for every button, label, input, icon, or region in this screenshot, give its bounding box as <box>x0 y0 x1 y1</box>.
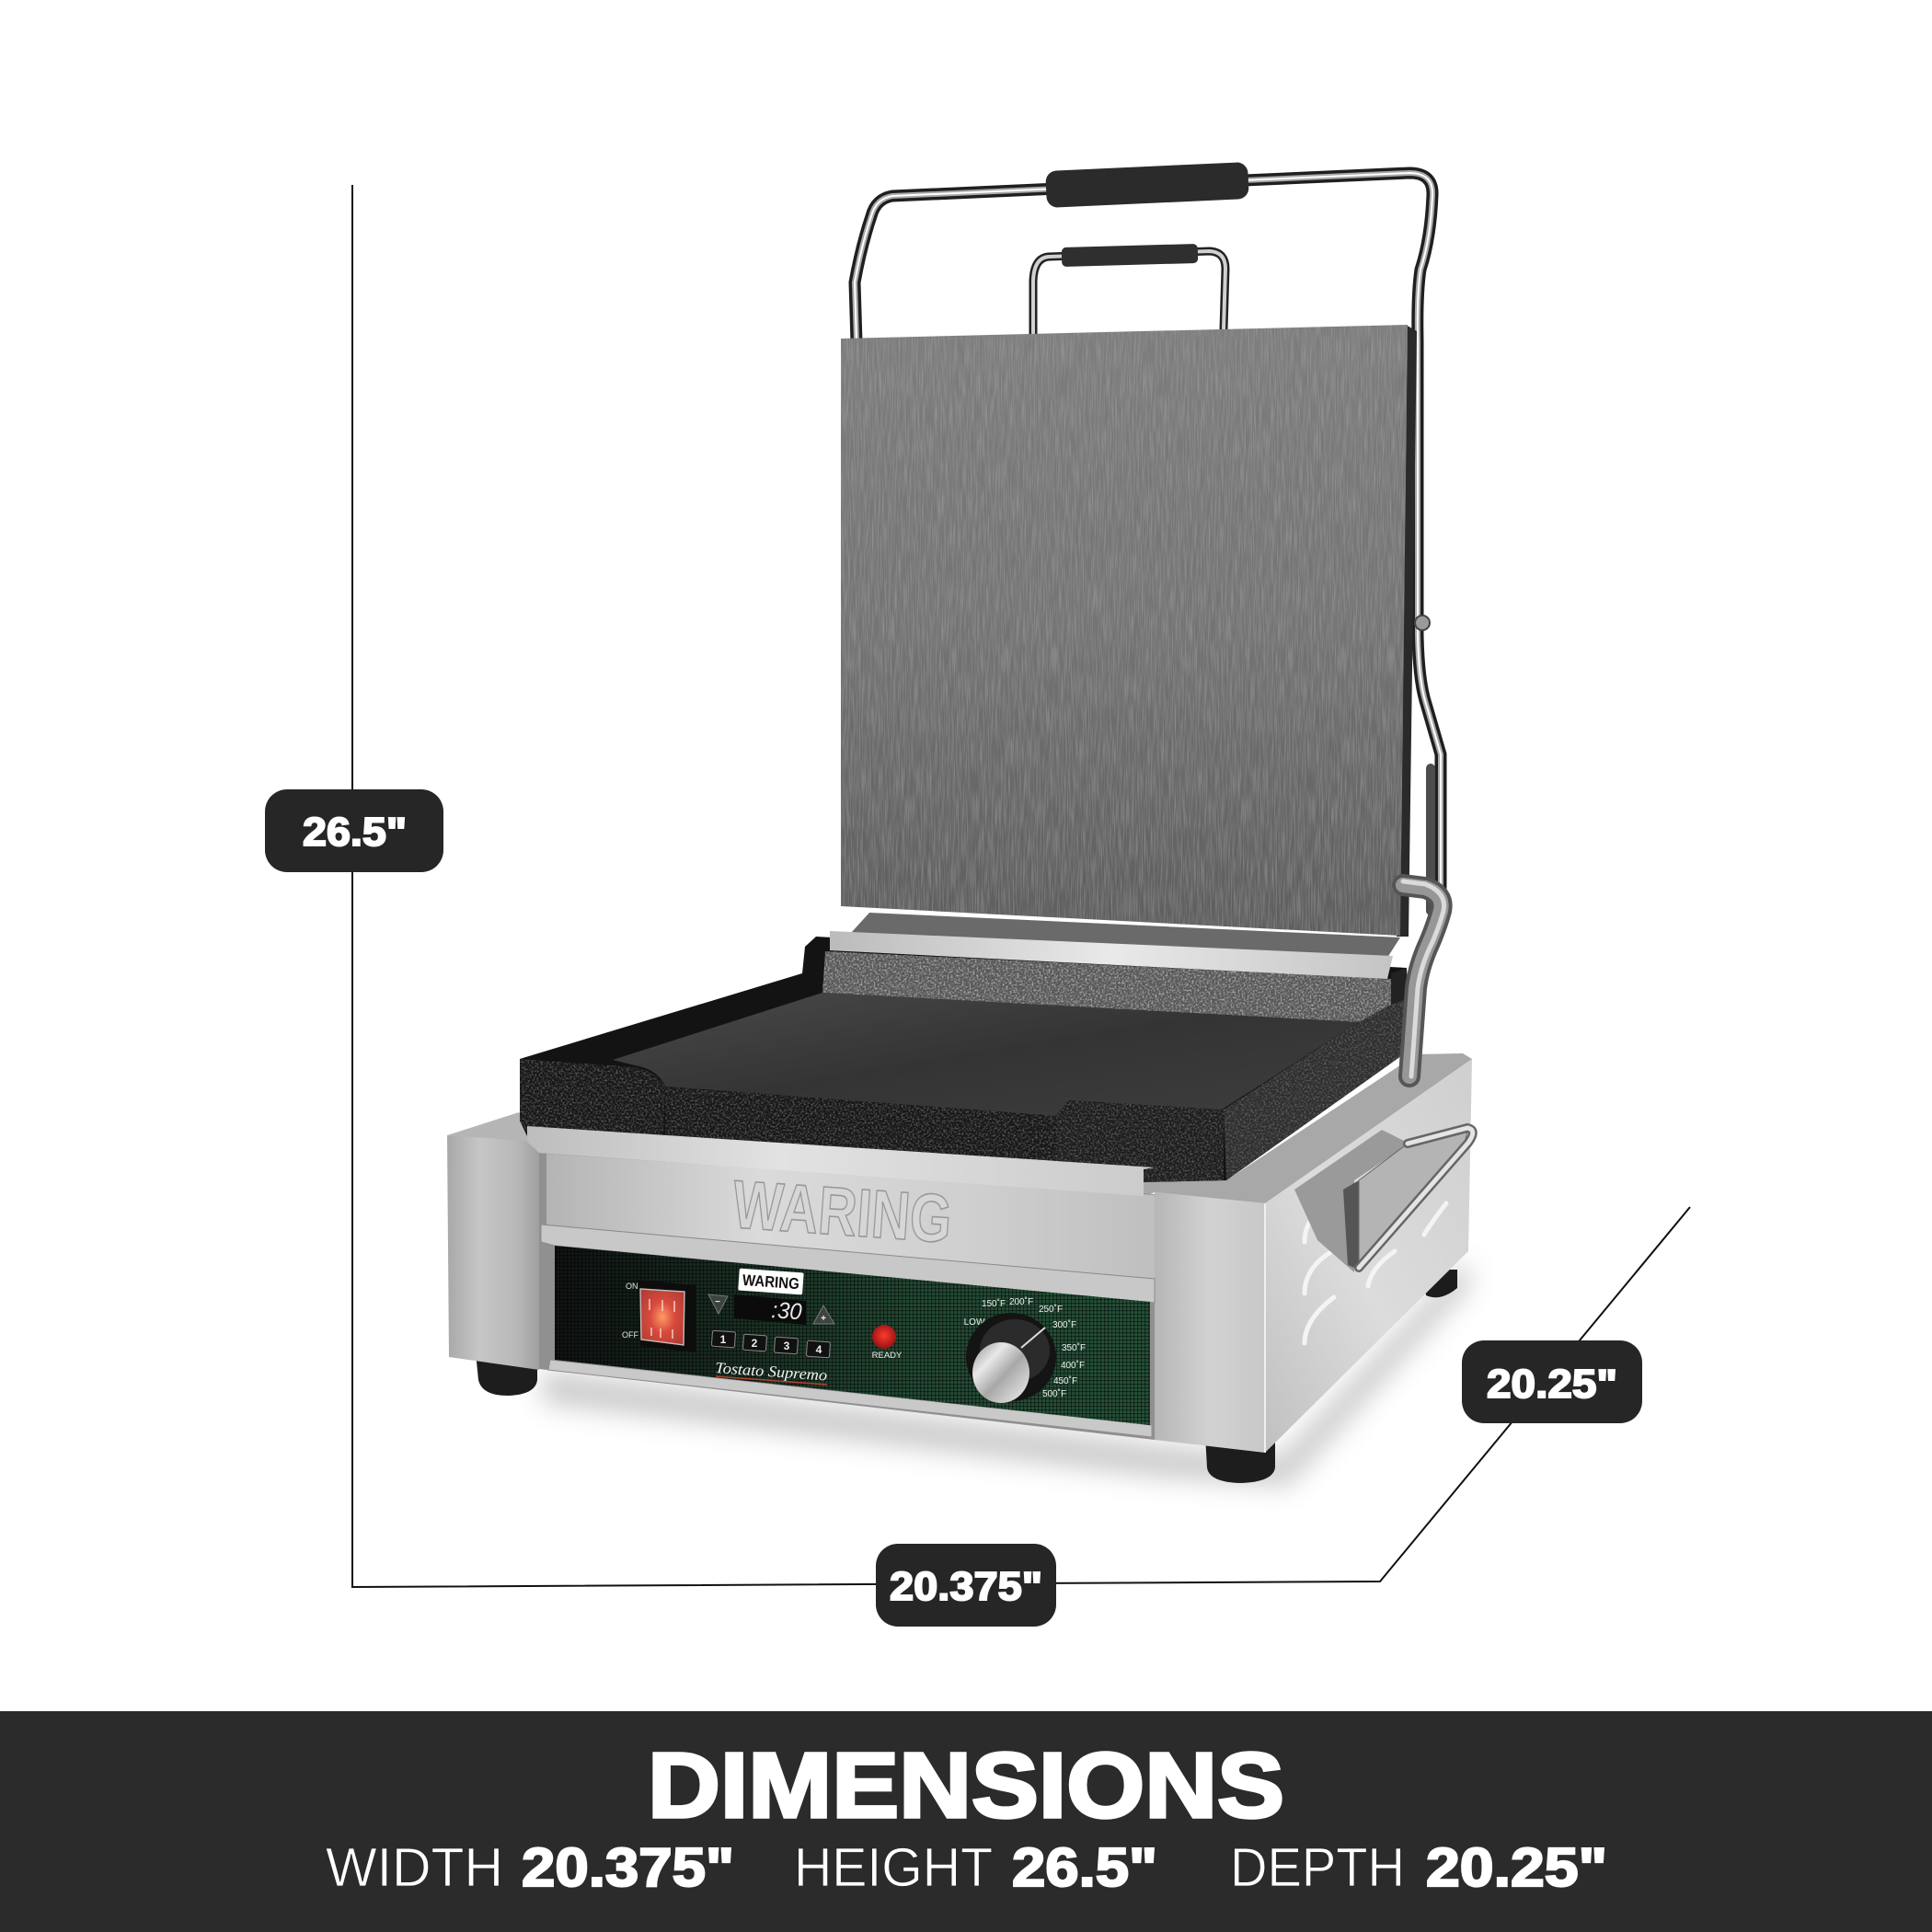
height value: 26.5" <box>303 810 407 855</box>
griddle cooking surface <box>613 993 1359 1116</box>
switch lens <box>640 1289 684 1345</box>
plus triangle <box>813 1305 834 1324</box>
switch housing <box>638 1280 696 1352</box>
steel scraper bar <box>830 931 1393 979</box>
small handle frame <box>1033 251 1225 339</box>
griddle front strip <box>665 1087 1056 1196</box>
knob body <box>966 1313 1056 1401</box>
depth number: 20.25" <box>1426 1837 1607 1898</box>
hinge shelf <box>851 913 1400 960</box>
right foot <box>1205 1435 1275 1483</box>
green mesh panel <box>555 1246 1150 1425</box>
250 label: 250˚F <box>1039 1304 1063 1315</box>
button 1 box <box>711 1330 736 1348</box>
griddle silhouette <box>520 937 1407 1182</box>
waring badge <box>738 1269 804 1294</box>
control panel <box>555 1246 1150 1425</box>
side corner line <box>1264 1203 1266 1453</box>
plus button <box>813 1305 834 1324</box>
left pillar <box>447 1135 539 1370</box>
knob pointer <box>1021 1328 1045 1348</box>
button 2 label: 2 <box>752 1337 758 1350</box>
product: panini grill <box>447 162 1473 1486</box>
floor shadow <box>543 1260 1472 1486</box>
on label: ON <box>626 1282 638 1291</box>
height number: 26.5" <box>1012 1837 1157 1898</box>
footer background <box>0 1711 1932 1932</box>
footer band <box>0 1711 1932 1932</box>
hinge bolt <box>1415 615 1430 630</box>
display background <box>734 1294 806 1325</box>
width label <box>876 1544 1056 1627</box>
off label: OFF <box>622 1330 638 1340</box>
450 label: 450˚F <box>1053 1375 1077 1386</box>
latch bar <box>1359 1128 1473 1268</box>
left foot <box>476 1352 537 1396</box>
height pill <box>265 789 443 872</box>
front panel frame <box>539 1153 1155 1440</box>
divider strip <box>541 1225 1155 1303</box>
title: DIMENSIONS <box>648 1734 1284 1837</box>
button 4 box <box>806 1340 831 1358</box>
model name: Tostato Supremo <box>715 1359 828 1385</box>
height caption: HEIGHT <box>794 1837 993 1898</box>
height label <box>265 789 443 872</box>
body top surface <box>1141 1053 1472 1203</box>
switch marks <box>650 1299 674 1339</box>
200 label: 200˚F <box>1009 1296 1033 1307</box>
preset button 4 <box>806 1340 831 1358</box>
griddle side <box>1224 998 1408 1180</box>
latch rear plate <box>1294 1130 1409 1272</box>
left top surface <box>447 1112 552 1145</box>
latch dark fold <box>1343 1180 1359 1270</box>
griddle back right corner <box>1380 968 1409 1023</box>
lower trim <box>548 1360 1152 1437</box>
knob cap <box>972 1342 1029 1403</box>
knob ridges <box>980 1319 1050 1382</box>
rocker switch <box>638 1280 696 1352</box>
latch bracket <box>1294 1128 1473 1272</box>
timer display <box>734 1294 806 1325</box>
low label: LOW <box>964 1317 985 1328</box>
ready label: READY <box>872 1351 903 1361</box>
right pillar <box>1155 1192 1265 1453</box>
minus sign: − <box>715 1297 720 1307</box>
depth value: 20.25" <box>1487 1362 1617 1407</box>
small handle grip <box>1062 244 1198 267</box>
500 label: 500˚F <box>1042 1388 1066 1399</box>
large handle grip <box>1045 162 1249 208</box>
minus triangle <box>708 1294 728 1314</box>
dimension guide lines <box>352 185 1690 1587</box>
badge text: WARING <box>742 1271 799 1293</box>
front lip <box>527 1126 1155 1196</box>
button 3 label: 3 <box>784 1340 790 1352</box>
griddle left block <box>520 1059 665 1141</box>
width caption: WIDTH <box>326 1837 503 1898</box>
temperature knob <box>966 1313 1056 1403</box>
badge background <box>738 1269 804 1294</box>
display digits: :30 <box>771 1297 803 1325</box>
button 3 box <box>774 1337 799 1354</box>
embossed logo: WARING <box>730 1166 954 1258</box>
large handle frame <box>855 173 1441 911</box>
ready light <box>872 1325 896 1349</box>
depth caption: DEPTH <box>1230 1837 1405 1898</box>
upper plate edge <box>1397 325 1417 937</box>
plus sign: + <box>821 1314 826 1324</box>
preset button 3 <box>774 1337 799 1354</box>
400 label: 400˚F <box>1061 1360 1085 1371</box>
model underline <box>716 1376 827 1385</box>
button 4 label: 4 <box>816 1343 822 1356</box>
lower arm <box>1403 881 1444 1076</box>
button 1 label: 1 <box>720 1333 727 1346</box>
width pill <box>876 1544 1056 1627</box>
300 label: 300˚F <box>1052 1319 1076 1330</box>
mesh texture <box>555 1246 1150 1425</box>
side vents <box>1305 1198 1446 1343</box>
350 label: 350˚F <box>1062 1342 1086 1353</box>
width value: 20.375" <box>890 1564 1042 1609</box>
minus button <box>708 1294 728 1314</box>
back right foot <box>1423 1270 1457 1297</box>
width number: 20.375" <box>522 1837 734 1898</box>
griddle back wall <box>822 951 1393 1022</box>
griddle right block <box>1056 1100 1224 1182</box>
latch front plate <box>1359 1128 1468 1270</box>
depth pill <box>1462 1340 1642 1423</box>
150 label: 150˚F <box>982 1298 1006 1309</box>
upper cooking plate <box>841 325 1408 936</box>
button 2 box <box>742 1334 767 1351</box>
temperature labels <box>964 1296 1086 1399</box>
preset button 1 <box>711 1330 736 1348</box>
body side panel <box>1265 1059 1472 1453</box>
preset button 2 <box>742 1334 767 1351</box>
depth label <box>1462 1340 1642 1423</box>
embossed front panel <box>546 1154 1155 1279</box>
